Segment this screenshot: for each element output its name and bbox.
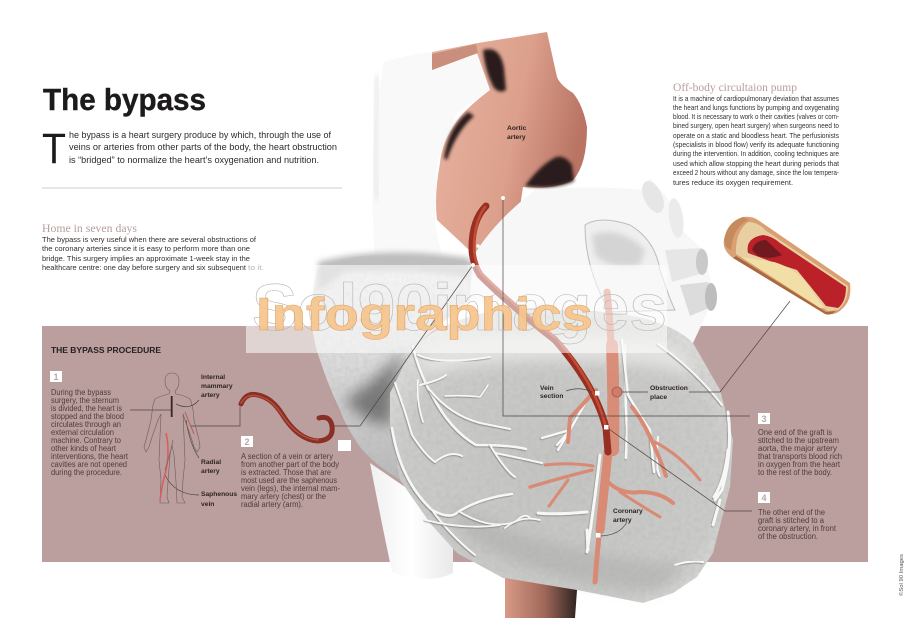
text block: off-body circulation pump: exceed 2 hours without any damage, since the low tempera- — [673, 168, 839, 177]
step 1: circulates through an — [51, 420, 121, 429]
labels: body diagram: Saphenous — [201, 491, 237, 498]
step 4: 4 — [761, 493, 767, 503]
text block: home in seven days: The bypass is very useful when there are several obstructions of — [42, 235, 257, 244]
step 1: interventions, the heart — [51, 452, 129, 461]
text block: off-body circulation pump: Off-body circultaion pump — [673, 82, 797, 94]
icon: artery cross-section with obstruction — [724, 217, 850, 315]
translucent watermark band — [246, 265, 667, 353]
step 2: from another part of the body — [241, 460, 339, 469]
step 3: One end of the graft is — [758, 428, 832, 437]
outer wall — [724, 217, 850, 314]
labels: heart: Aortic — [507, 125, 527, 132]
text block: off-body circulation pump: during the intervention. In addition, cooling techniques are — [673, 149, 839, 158]
text block: home in seven days: bridge. This surgery implies an approximate 1-week stay in the — [42, 254, 250, 263]
venous graft — [472, 206, 608, 452]
leader lines — [130, 198, 790, 536]
left atrium lobe — [312, 255, 472, 480]
upper white heart — [470, 178, 713, 343]
labels: heart — [507, 125, 688, 524]
title: The bypass — [43, 82, 206, 117]
lower wall — [733, 256, 836, 315]
text block: off-body circulation pump: (specialists in blood flow) verify its adequate functioning — [673, 140, 839, 149]
superior vena cava — [372, 52, 490, 270]
labels: heart: artery — [507, 134, 526, 141]
coronary artery — [530, 292, 700, 582]
drop cap: T — [42, 125, 66, 173]
plaque — [741, 257, 824, 308]
step 1: During the bypass — [51, 388, 111, 397]
ventricle — [390, 308, 733, 603]
labels: body diagram — [201, 374, 237, 508]
text block: off-body circulation pump: bined surgery, open heart surgery) when surgeons need to — [673, 121, 839, 130]
image credit: ©Sol 90 Images — [898, 554, 905, 596]
step 1: surgery, the sternum — [51, 396, 119, 405]
aortic artery — [432, 32, 587, 263]
step 4: graft is stitched to a — [758, 516, 825, 525]
step 3: in oxygen from the heart — [758, 460, 841, 469]
aorta shadows — [483, 49, 506, 92]
labels: body diagram: vein — [201, 501, 214, 508]
heading: the bypass procedure: THE BYPASS PROCEDURE — [51, 345, 161, 355]
text block: off-body circulation pump: tures reduce its oxygen requirement. — [673, 178, 793, 187]
text block: off-body circulation pump: It is a machine of cardiopulmonary deviation that assumes — [673, 94, 839, 103]
step 2 — [241, 436, 340, 509]
white vessel behind the heart — [370, 463, 453, 579]
step 1: during the procedure. — [51, 468, 122, 477]
step 1: external circulation — [51, 428, 114, 437]
intro text: veins or arteries from other parts of the body, the heart obstruction — [69, 141, 337, 152]
text block: off-body circulation pump: blood. It is necessary to work o their cavities (valves or com- — [673, 112, 839, 121]
step 1: machine. Contrary to — [51, 436, 122, 445]
dark lumen interior — [752, 240, 782, 258]
step 3: to the rest of the body. — [758, 468, 832, 477]
icon: human body diagram — [144, 373, 200, 503]
labels: body diagram: Radial — [201, 459, 221, 466]
icon: extracted graft vessel — [241, 394, 332, 441]
labels: heart: section — [540, 393, 563, 400]
watermark: Sol90images — [252, 270, 667, 344]
number badge 2 — [241, 436, 253, 447]
labels: body diagram: Internal — [201, 374, 225, 381]
lumen — [748, 235, 846, 308]
step 2: vein (legs), the internal mam- — [241, 484, 340, 493]
labels: body diagram: artery — [201, 468, 220, 475]
step 3: that transports blood rich — [758, 452, 842, 461]
step 1: cavities are not opened — [51, 460, 127, 469]
step 1: stopped and the blood — [51, 412, 124, 421]
step 1: is divided, the heart is — [51, 404, 122, 413]
text block: home in seven days: healthcare centre: one day before surgery and six subsequent — [42, 263, 247, 272]
step 2: 2 — [244, 437, 250, 447]
text block: home in seven days: to it. — [248, 263, 264, 272]
internal mammary artery — [171, 396, 173, 417]
great vessel tubes — [638, 178, 668, 216]
descending tube — [505, 578, 577, 618]
blank white badge — [338, 440, 351, 451]
step 2: radial artery (arm). — [241, 500, 303, 509]
labels: heart: Coronary — [613, 508, 643, 515]
step 2: most used are the saphenous — [241, 476, 337, 485]
step 4: coronary artery, in front — [758, 524, 837, 533]
labels: heart: artery — [613, 517, 632, 524]
divider — [42, 188, 342, 189]
text block: off-body circulation pump: used which allow stopping the heart during periods that — [673, 159, 840, 168]
step 1: 1 — [53, 372, 59, 382]
labels: heart: Obstruction — [650, 385, 688, 392]
watermark: Infographics — [256, 288, 593, 340]
step 1 — [50, 371, 129, 477]
labels: heart: Vein — [540, 385, 554, 392]
white veins — [392, 340, 730, 565]
radial artery — [185, 412, 194, 434]
text block: home in seven days — [42, 223, 264, 272]
text block: off-body circulation pump: the heart and lungs functions by pumping and oxygenating — [673, 103, 839, 112]
step 1: other kinds of heart — [51, 444, 117, 453]
panel: bypass procedure background — [42, 326, 868, 562]
coronary obstruction ring — [612, 387, 622, 397]
flange — [724, 217, 749, 250]
intro text: is “bridged” to normalize the heart’s oxygenation and nutrition. — [69, 154, 319, 165]
cut face — [736, 222, 848, 311]
number badge 1 — [50, 371, 62, 382]
step 4: The other end of the — [758, 508, 826, 517]
step 3: stitched to the upstream — [758, 436, 839, 445]
number badge 4 — [758, 492, 770, 503]
step 2: is extracted. Those that are — [241, 468, 332, 477]
step 3: 3 — [761, 414, 767, 424]
step 2: A section of a vein or artery — [241, 452, 333, 461]
right atrium lobe — [585, 220, 675, 312]
text block: off-body circulation pump — [673, 82, 840, 187]
left lobe shading — [345, 350, 405, 425]
step 3: aorta, the major artery — [758, 444, 837, 453]
step 4: of the obstruction. — [758, 532, 818, 541]
labels: heart: place — [650, 394, 667, 401]
labels: body diagram: artery — [201, 392, 220, 399]
intro text — [42, 125, 337, 173]
leader dots — [471, 196, 608, 538]
text block: home in seven days: Home in seven days — [42, 223, 138, 235]
text block: off-body circulation pump: operate on a static and bloodless heart. The perfusionists — [673, 131, 839, 140]
step 3 — [758, 413, 842, 477]
text block: home in seven days: the coronary arteries since it is easy to perform more than one — [42, 244, 250, 253]
labels: body diagram: mammary — [201, 383, 233, 390]
number badge 3 — [758, 413, 770, 424]
step 4 — [758, 492, 837, 541]
illustration: heart — [246, 32, 733, 618]
step 2: mary artery (chest) or the — [241, 492, 327, 501]
intro text: he bypass is a heart surgery produce by which, through the use of — [69, 129, 331, 140]
saphenous vein in red — [160, 433, 168, 500]
